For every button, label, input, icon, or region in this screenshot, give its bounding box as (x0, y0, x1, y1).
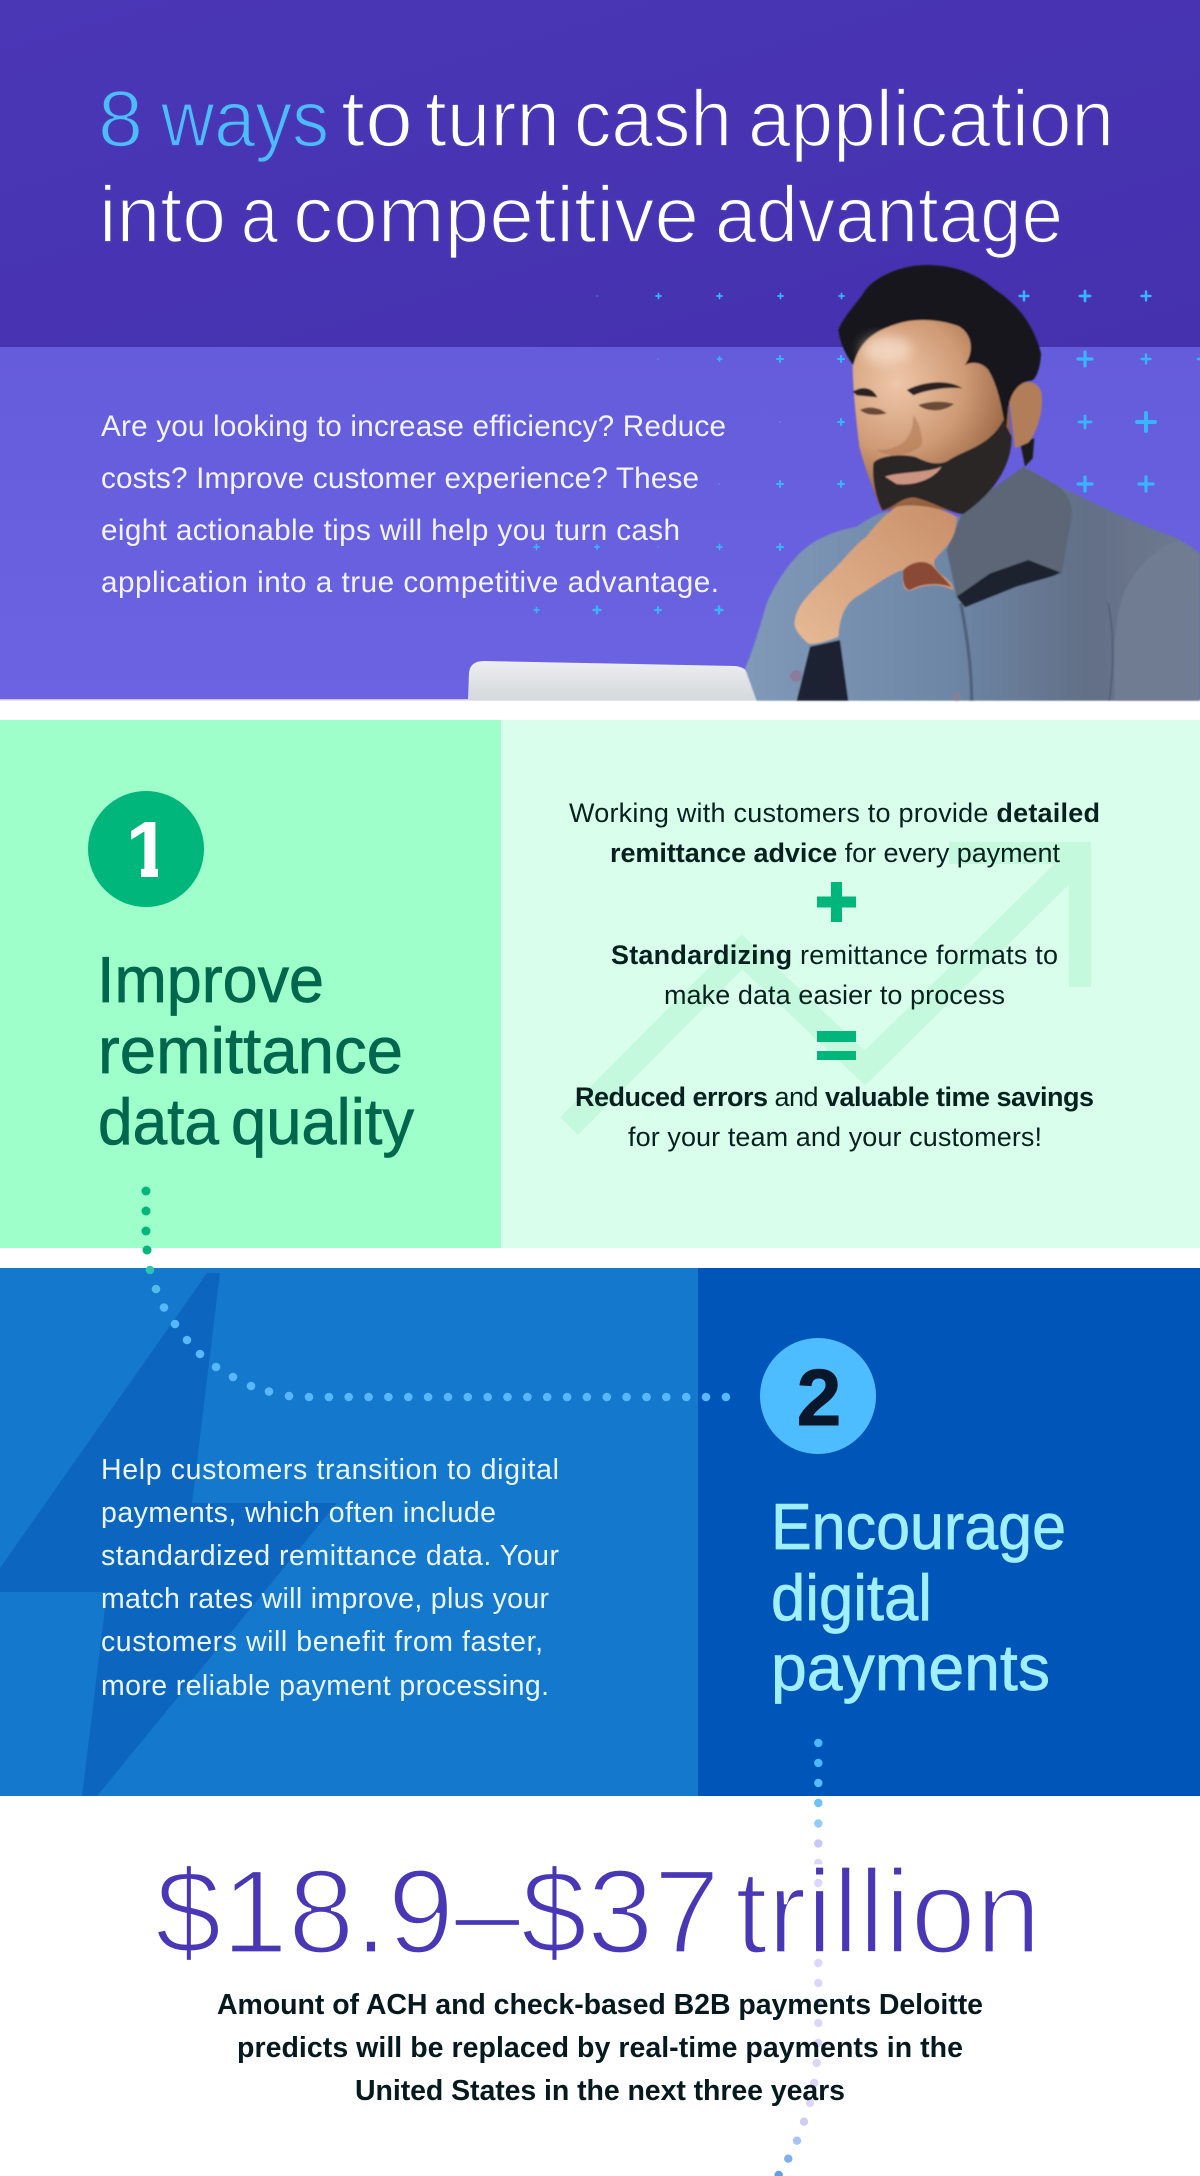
panel: step 2 detail (0, 1268, 698, 1796)
title: application (748, 74, 1114, 163)
panel: header title band (0, 0, 1200, 347)
icon: plus (817, 882, 856, 922)
heading: encourage digital payments: Encourage (771, 1490, 1066, 1563)
heading: encourage digital payments (771, 1490, 1066, 1704)
heading: improve remittance data quality: Improve (97, 943, 324, 1016)
statistic caption: predicts will be replaced by real-time payments in the (237, 2032, 963, 2064)
icon: pale rising arrow (569, 853, 1080, 1126)
panel: step 1 detail (501, 720, 1200, 1248)
text: remittance advice: Working with customers to provide detailed (569, 798, 1100, 828)
title: into (99, 170, 226, 259)
statistic caption: Amount of ACH and check-based B2B payments Deloitte (217, 1989, 983, 2021)
title: turn (425, 74, 560, 163)
big statistic: trillion (735, 1845, 1041, 1979)
big statistic: $18.9–$37 (155, 1845, 720, 1979)
intro text (101, 410, 726, 599)
title: to (341, 74, 413, 163)
plus pattern (534, 291, 1200, 614)
heading: encourage digital payments: payments (771, 1631, 1050, 1704)
text: reduced errors: for your team and your customers! (628, 1122, 1042, 1152)
icon: number 1 badge: 1 (126, 805, 170, 894)
title: cash (574, 74, 732, 163)
icon: number 2 badge (760, 1338, 876, 1454)
icon: equals (817, 1031, 856, 1060)
title: ways (160, 74, 329, 163)
icon: number 2 badge: 2 (797, 1353, 841, 1442)
intro text: application into a true competitive advantage. (101, 566, 719, 599)
text: help customers: more reliable payment processing. (101, 1670, 549, 1702)
text: help customers: standardized remittance data. Your (101, 1540, 560, 1572)
text: standardizing: Standardizing remittance formats to (611, 940, 1058, 970)
intro text: eight actionable tips will help you turn cash (101, 514, 680, 547)
text: reduced errors: Reduced errors and valuable time savings (575, 1082, 1094, 1112)
title: a (241, 170, 278, 259)
intro text: costs? Improve customer experience? These (101, 462, 699, 495)
icon: number 1 badge (88, 791, 204, 907)
heading: improve remittance data quality: remittance (98, 1014, 403, 1087)
text: help customers: Help customers transition to digital (101, 1454, 559, 1486)
text: help customers: payments, which often include (101, 1497, 496, 1529)
statistic caption (217, 1989, 983, 2107)
text: help customers: match rates will improve, plus your (101, 1583, 550, 1615)
heading: encourage digital payments: digital (771, 1561, 932, 1634)
text: reduced errors (575, 1082, 1094, 1152)
title: competitive (293, 170, 699, 259)
text: remittance advice: remittance advice for every payment (610, 838, 1060, 868)
dotted connector: step 2 to next step (774, 1739, 822, 2176)
text: remittance advice (569, 798, 1100, 868)
title: 8 (98, 74, 143, 163)
statistic caption: United States in the next three years (355, 2075, 845, 2107)
panel: step 1 heading (0, 720, 501, 1248)
heading: improve remittance data quality (97, 943, 414, 1158)
text: standardizing: make data easier to process (664, 980, 1005, 1010)
heading: improve remittance data quality: data (98, 1085, 220, 1158)
title: advantage (715, 170, 1063, 259)
panel: step 2 heading (698, 1268, 1200, 1796)
heading: improve remittance data quality: quality (231, 1085, 414, 1158)
panel: intro band (0, 265, 1200, 701)
photo: man with hand on chin (745, 265, 1200, 701)
text: help customers (101, 1454, 560, 1702)
title (98, 74, 1114, 259)
icon: laptop (468, 661, 758, 700)
intro text: Are you looking to increase efficiency? Reduce (101, 410, 726, 443)
text: help customers: customers will benefit from faster, (101, 1626, 543, 1658)
icon: lightning bolt background (0, 1273, 337, 1796)
dotted connector: step 1 to step 2 (142, 1186, 730, 1401)
text: standardizing (611, 940, 1058, 1010)
